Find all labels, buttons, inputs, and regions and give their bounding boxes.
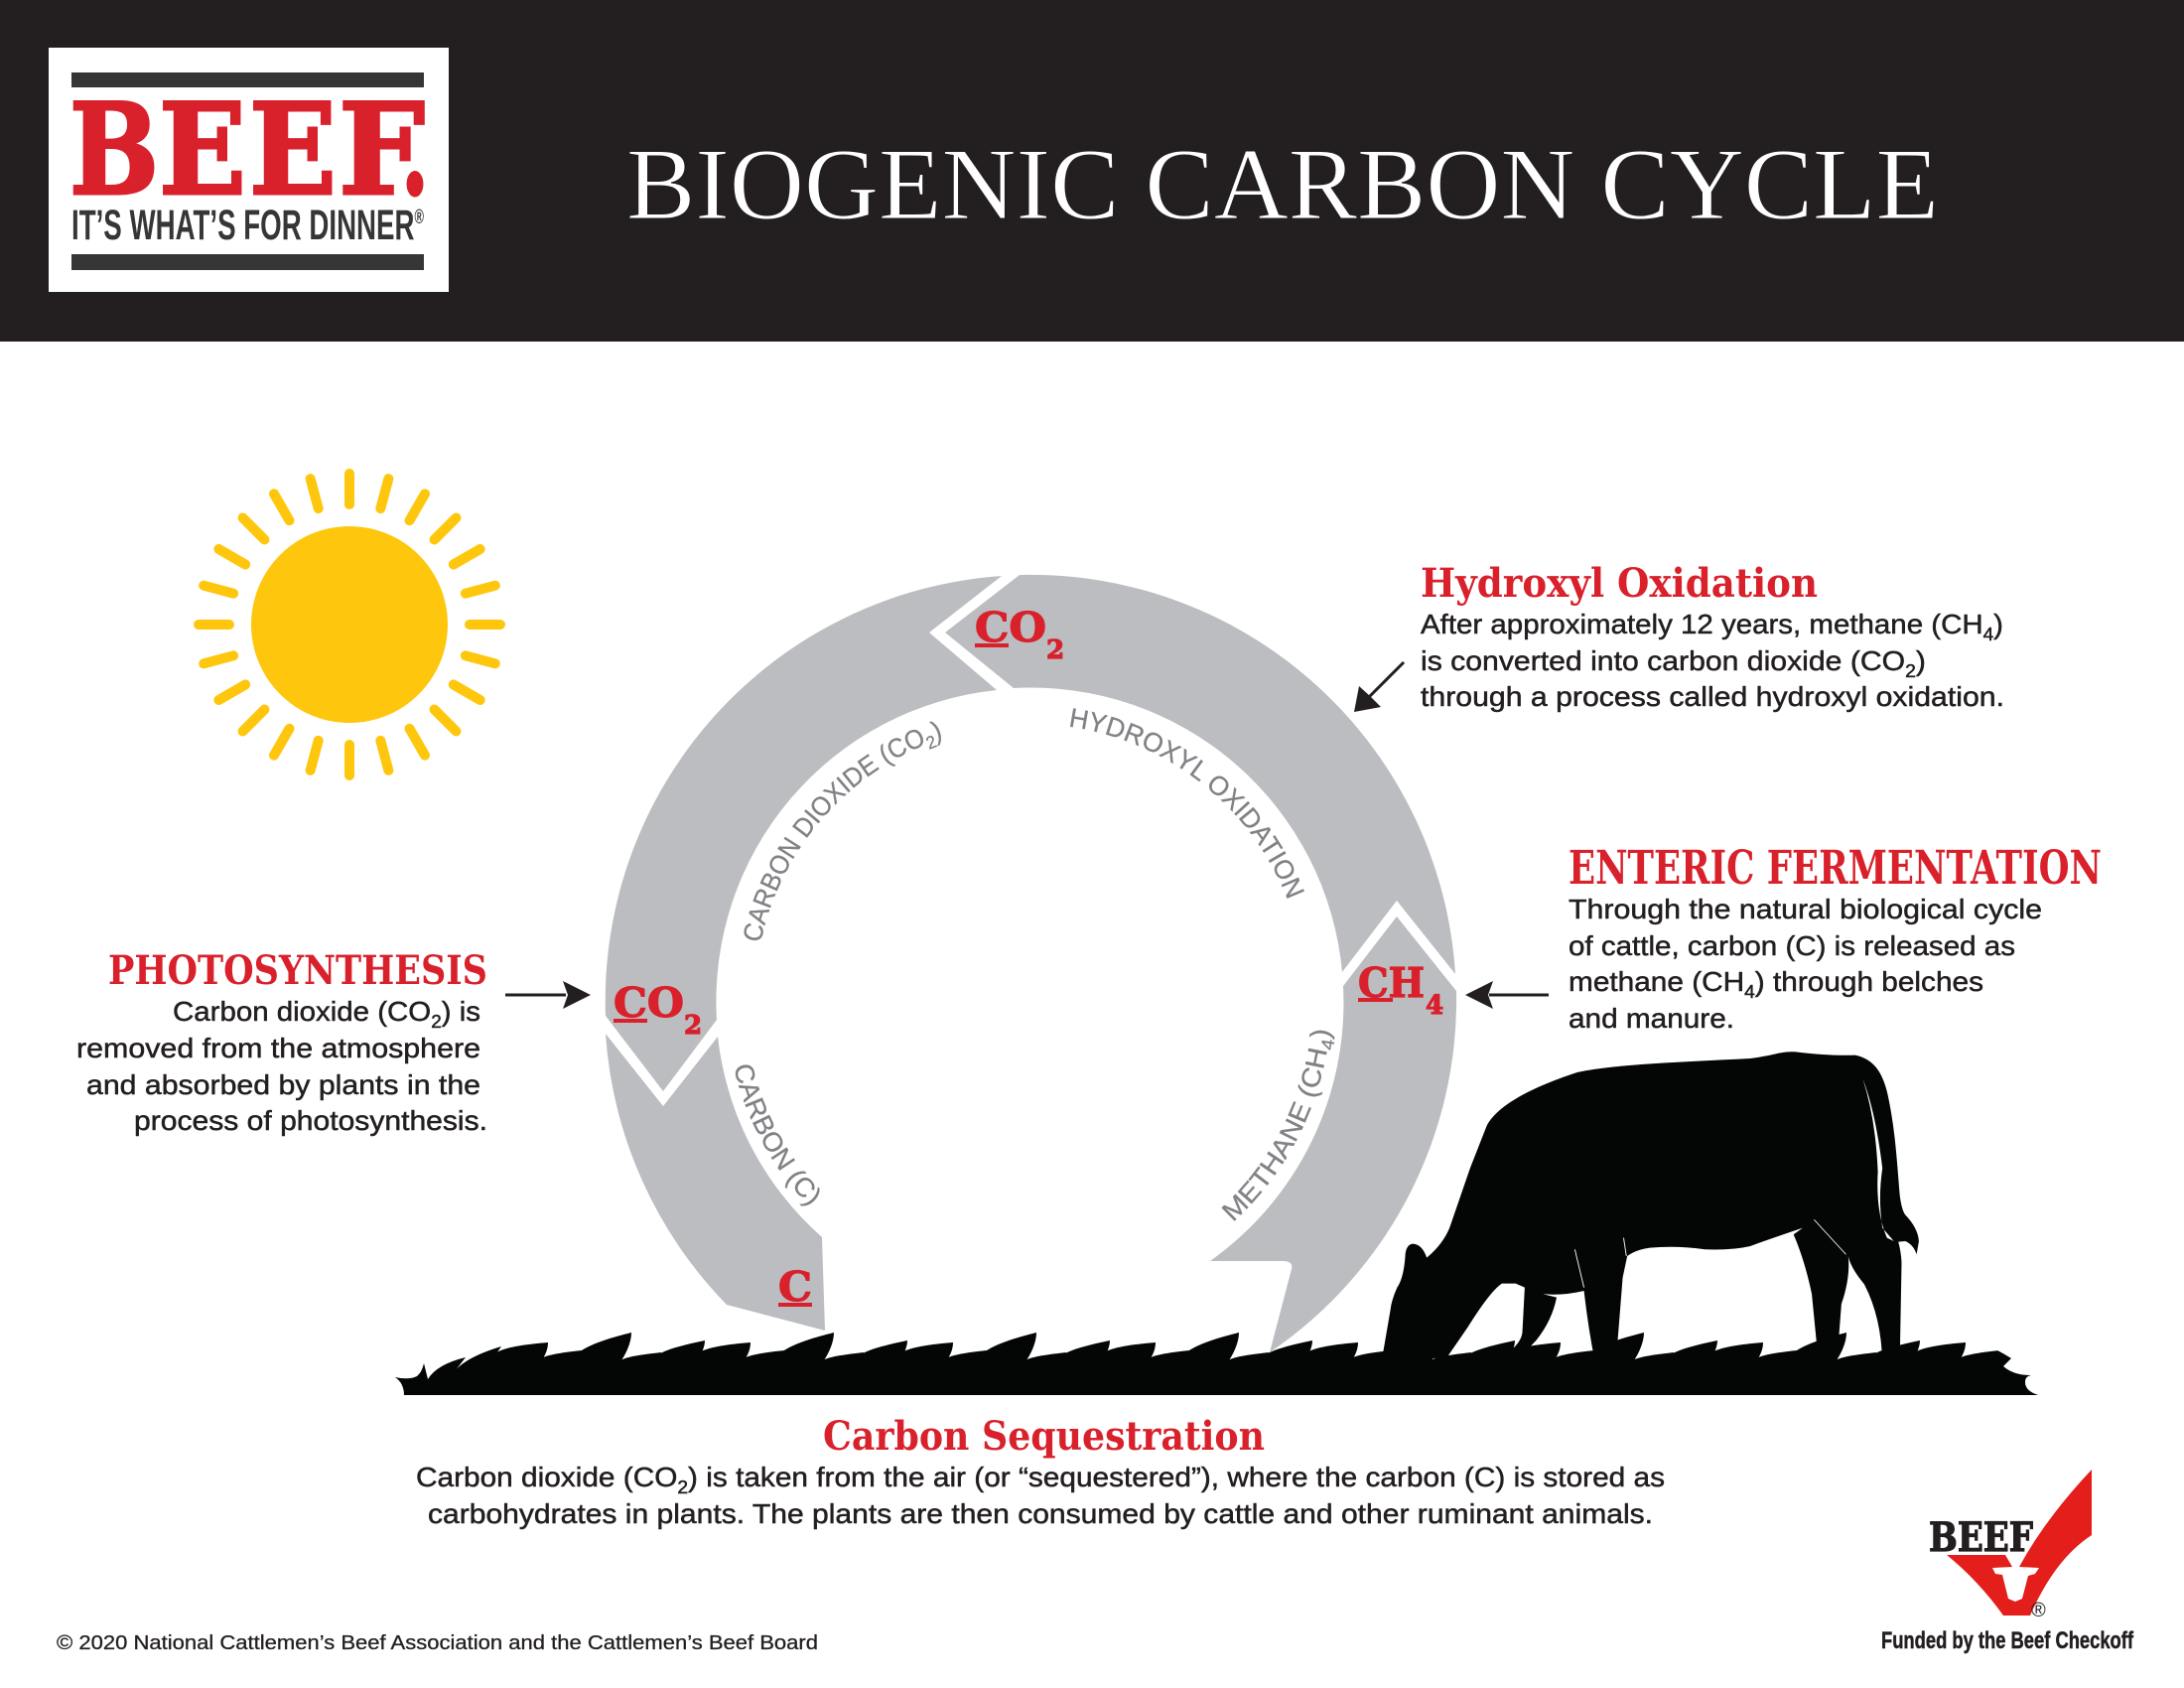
formula: CO2 top: CO bbox=[975, 604, 1046, 651]
title: BIOGENIC CARBON CYCLE bbox=[626, 128, 1939, 241]
text block: enteric fermentation: 4 bbox=[1744, 982, 1755, 1002]
text block: photosynthesis: is bbox=[459, 996, 479, 1027]
arrow: hydroxyl oxidation bbox=[1354, 662, 1404, 712]
logo: Beef Checkoff: ® bbox=[2031, 1600, 2046, 1621]
arc label: carbon: CARBON (C) bbox=[735, 1064, 820, 1206]
ring segment: hydroxyl oxidation bbox=[945, 575, 1455, 974]
text block: photosynthesis: 2 bbox=[431, 1012, 442, 1032]
text block: hydroxyl oxidation: ) bbox=[1916, 645, 1926, 676]
text block: carbon sequestration: 2 bbox=[677, 1477, 688, 1497]
ring segment: methane bbox=[1210, 916, 1456, 1352]
grass bbox=[395, 1321, 2124, 1396]
ring segment: carbon dioxide bbox=[606, 576, 1002, 1091]
text block: carbon sequestration bbox=[416, 1413, 1665, 1529]
text block: enteric fermentation: through belches bbox=[1772, 966, 1971, 997]
copyright: © 2020 National Cattlemen’s Beef Association and the Cattlemen’s Beef Board bbox=[57, 1632, 818, 1654]
formula: CO2 left: 2 bbox=[684, 1011, 702, 1041]
arc label: methane: 4 bbox=[1321, 1040, 1334, 1051]
text block: enteric fermentation: Through the natural biological cycle bbox=[1569, 894, 2042, 924]
arc label: carbon dioxide: 2 bbox=[926, 736, 937, 750]
text block: enteric fermentation: and manure. bbox=[1569, 1003, 1734, 1034]
logo: Beef It's What's For Dinner: E bbox=[159, 76, 246, 223]
text block: hydroxyl oxidation: 2 bbox=[1905, 661, 1916, 681]
arc label: carbon dioxide: ) bbox=[929, 721, 941, 747]
arc label: methane: ) bbox=[1308, 1031, 1334, 1041]
arrow: enteric fermentation bbox=[1465, 981, 1549, 1009]
icon: sun bbox=[199, 474, 500, 775]
text block: carbon sequestration: carbohydrates in plants. The plants are then consumed by cattle and other ruminant animals. bbox=[428, 1498, 1653, 1529]
text block: hydroxyl oxidation: through a process called hydroxyl oxidation. bbox=[1421, 681, 2004, 712]
logo: Beef It's What's For Dinner bbox=[49, 48, 449, 292]
formula: CO2 left bbox=[614, 979, 702, 1041]
text block: carbon sequestration: is taken from the air (or “sequestered”), where the carbon (C) is stored as bbox=[706, 1462, 1606, 1492]
header band bbox=[0, 0, 2184, 342]
arc label: hydroxyl oxidation: HYDROXYL OXIDATION bbox=[1070, 708, 1304, 899]
text block: photosynthesis: removed from the atmosphere bbox=[76, 1033, 480, 1063]
text block: photosynthesis: Carbon dioxide (CO bbox=[173, 996, 418, 1027]
logo: Beef It's What's For Dinner: E bbox=[249, 76, 337, 223]
formula: CO2 top bbox=[975, 604, 1064, 665]
cow silhouette bbox=[1381, 1052, 1919, 1363]
formula: C: C bbox=[778, 1263, 812, 1311]
text block: enteric fermentation bbox=[1569, 841, 2102, 1034]
logo: Beef Checkoff bbox=[1881, 1470, 2134, 1654]
text block: hydroxyl oxidation: is converted into carbon dioxide (CO bbox=[1421, 645, 1870, 676]
logo: Beef It's What's For Dinner: . bbox=[401, 76, 429, 223]
text block: enteric fermentation: ) bbox=[1755, 966, 1765, 997]
text block: photosynthesis bbox=[76, 947, 487, 1136]
text block: carbon sequestration: Carbon Sequestration bbox=[823, 1413, 1265, 1460]
text block: hydroxyl oxidation: Hydroxyl Oxidation bbox=[1421, 560, 1818, 607]
logo: Beef It's What's For Dinner: ® bbox=[415, 207, 424, 228]
arc label: carbon dioxide: CARBON DIOXIDE (CO bbox=[744, 729, 923, 941]
text block: photosynthesis: ) bbox=[442, 996, 452, 1027]
text block: hydroxyl oxidation: After approximately 12 years, methane (CH bbox=[1421, 609, 1955, 639]
logo: Beef Checkoff: BEEF bbox=[1929, 1514, 2033, 1561]
text block: photosynthesis: and absorbed by plants in the bbox=[86, 1069, 480, 1100]
logo: Beef It's What's For Dinner: IT’S WHAT’S FOR DINNER bbox=[71, 202, 605, 249]
text block: hydroxyl oxidation: ) bbox=[1993, 609, 2003, 639]
text block: hydroxyl oxidation bbox=[1421, 560, 2004, 712]
text block: enteric fermentation: of cattle, carbon (C) is released as bbox=[1569, 930, 2015, 961]
ring segment: carbon bbox=[606, 1034, 825, 1331]
logo: Beef It's What's For Dinner: B bbox=[69, 76, 159, 223]
formula: CO2 left: CO bbox=[614, 979, 684, 1027]
text block: carbon sequestration: Carbon dioxide (CO bbox=[416, 1462, 661, 1492]
formula: CH4 bbox=[1358, 959, 1443, 1021]
text block: photosynthesis: process of photosynthesis. bbox=[134, 1105, 487, 1136]
arrow: photosynthesis bbox=[505, 981, 591, 1009]
formula: CH4: 4 bbox=[1426, 991, 1443, 1021]
formula: CH4: CH bbox=[1358, 959, 1425, 1007]
text block: photosynthesis: PHOTOSYNTHESIS bbox=[108, 947, 487, 994]
text block: enteric fermentation: methane (CH bbox=[1569, 966, 1734, 997]
logo: Beef It's What's For Dinner: F bbox=[339, 76, 425, 223]
carbon cycle ring bbox=[606, 574, 1457, 1352]
formula: CO2 top: 2 bbox=[1046, 635, 1064, 665]
arc label: methane: METHANE (CH bbox=[1221, 1049, 1327, 1221]
text block: carbon sequestration: ) bbox=[688, 1462, 698, 1492]
text block: hydroxyl oxidation: 4 bbox=[1983, 625, 1993, 644]
